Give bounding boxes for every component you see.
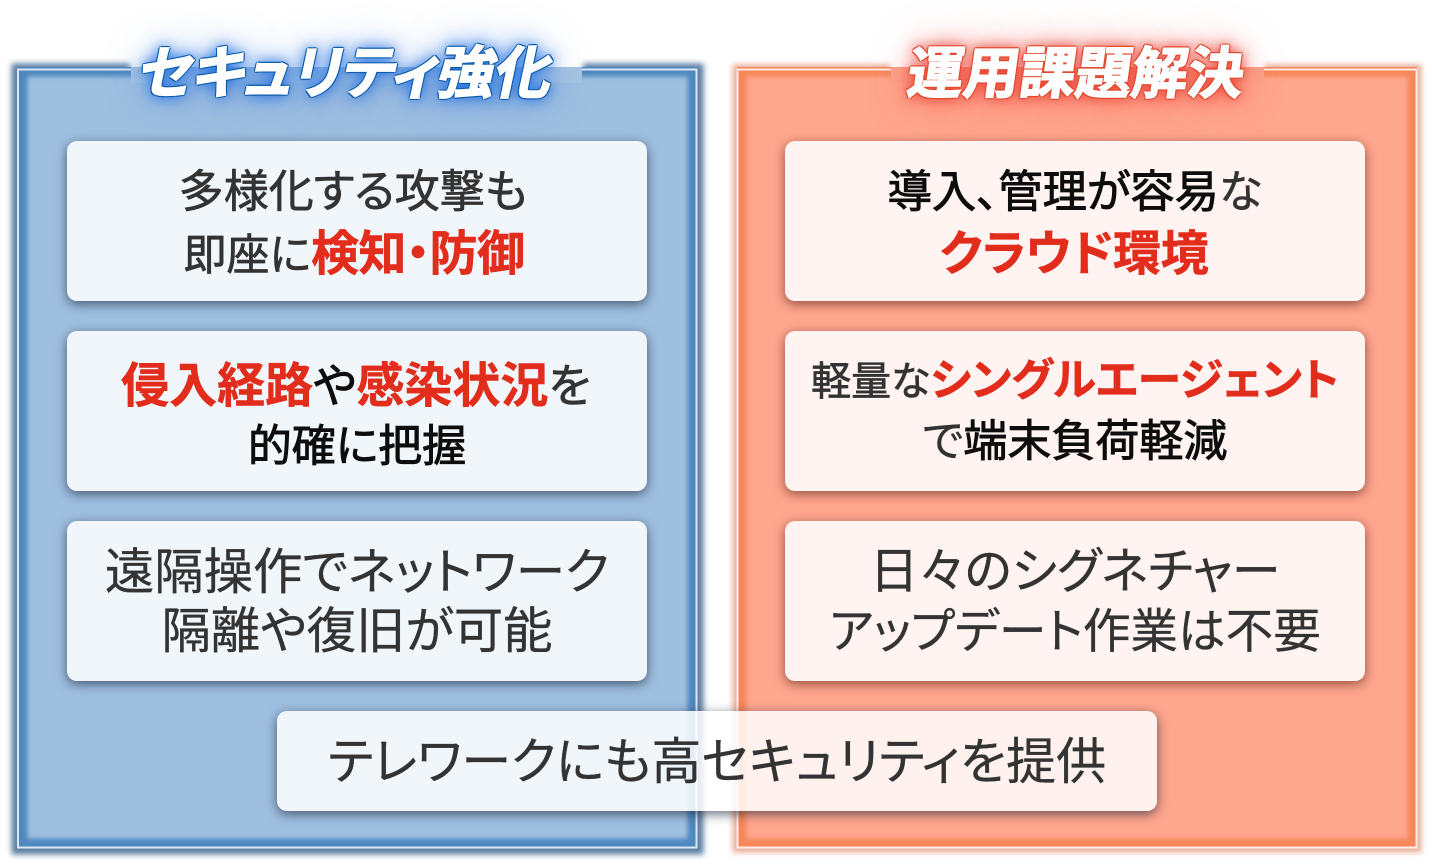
card: single agent [785,331,1365,491]
text line: 的確に把握 [248,422,466,471]
title: operations: 運用課題解決 [904,42,1248,105]
card: intrusion paths [67,331,647,491]
text line: テレワークにも高セキュリティを提供 [328,734,1106,790]
text line: で端末負荷軽減 [923,417,1227,466]
frame: operations [737,67,1417,848]
text line: 遠隔操作でネットワーク [105,545,609,600]
card: detection [67,141,647,301]
card: no signature [785,521,1365,681]
card: remote isolation [67,521,647,681]
text line with highlights: 侵入経路や感染状況を [121,360,591,413]
card: telework [277,711,1157,811]
text line with highlight: 軽量なシングルエージェント [811,356,1339,405]
text line: アップデート作業は不要 [829,606,1321,659]
text line: 隔離や復旧が可能 [161,604,553,659]
card: cloud [785,141,1365,301]
text line: 日々のシグネチャー [870,545,1280,599]
frame: security [17,67,698,849]
text line: 導入、管理が容易な [888,168,1262,217]
text line highlight: クラウド環境 [940,228,1208,281]
title: security: セキュリティ強化 [132,42,560,106]
text line: 多様化する攻撃も [179,166,527,217]
text line with highlight: 即座に検知・防御 [184,228,524,281]
